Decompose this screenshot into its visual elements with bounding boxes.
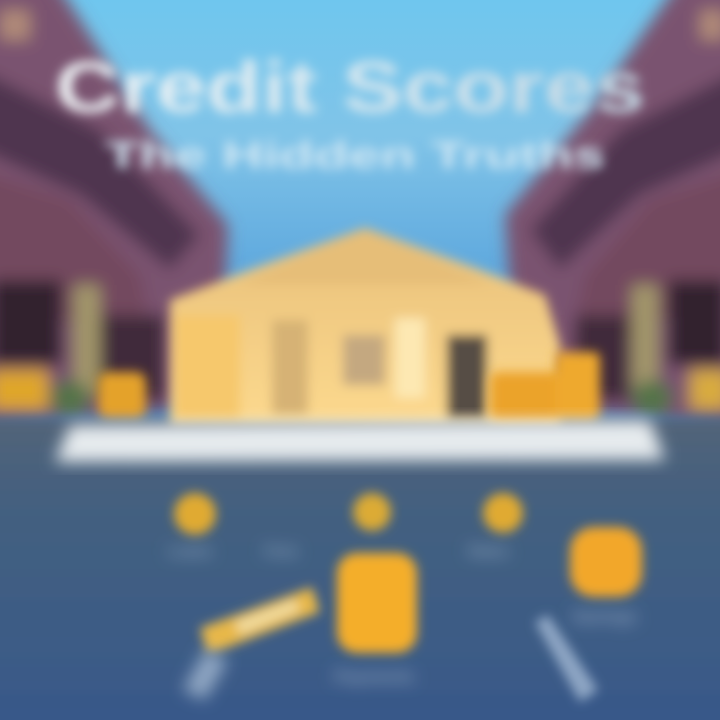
sky background: [0, 0, 720, 450]
title: Credit Scores: [55, 48, 645, 128]
small labels under icons: Rates: [468, 543, 509, 560]
coin icon 4: [570, 527, 642, 597]
small labels under icons: Savings: [572, 607, 637, 626]
small labels under icons: Fees: [264, 543, 298, 560]
title: [55, 48, 645, 177]
subtitle: The Hidden Truths: [105, 135, 605, 177]
coin icon 1: [174, 493, 216, 535]
coin icon 3: [483, 493, 523, 533]
small labels under icons: Payments: [334, 667, 414, 686]
tall coin cylinder: [337, 553, 417, 653]
diagonal credit card strip: [200, 587, 320, 655]
coin stacks beside the bank: [98, 352, 600, 422]
white plaza strip: [55, 420, 665, 462]
coin icon 2: [353, 493, 391, 531]
pale diagonal strip lower right: [535, 615, 598, 702]
bank building: [170, 228, 560, 425]
small labels under icons: Loans: [168, 543, 212, 560]
pale diagonal strip lower left: [183, 650, 228, 700]
right building row: [505, 0, 720, 425]
ground: [0, 418, 720, 720]
small labels under icons: [168, 543, 637, 686]
left building row: [0, 0, 228, 425]
